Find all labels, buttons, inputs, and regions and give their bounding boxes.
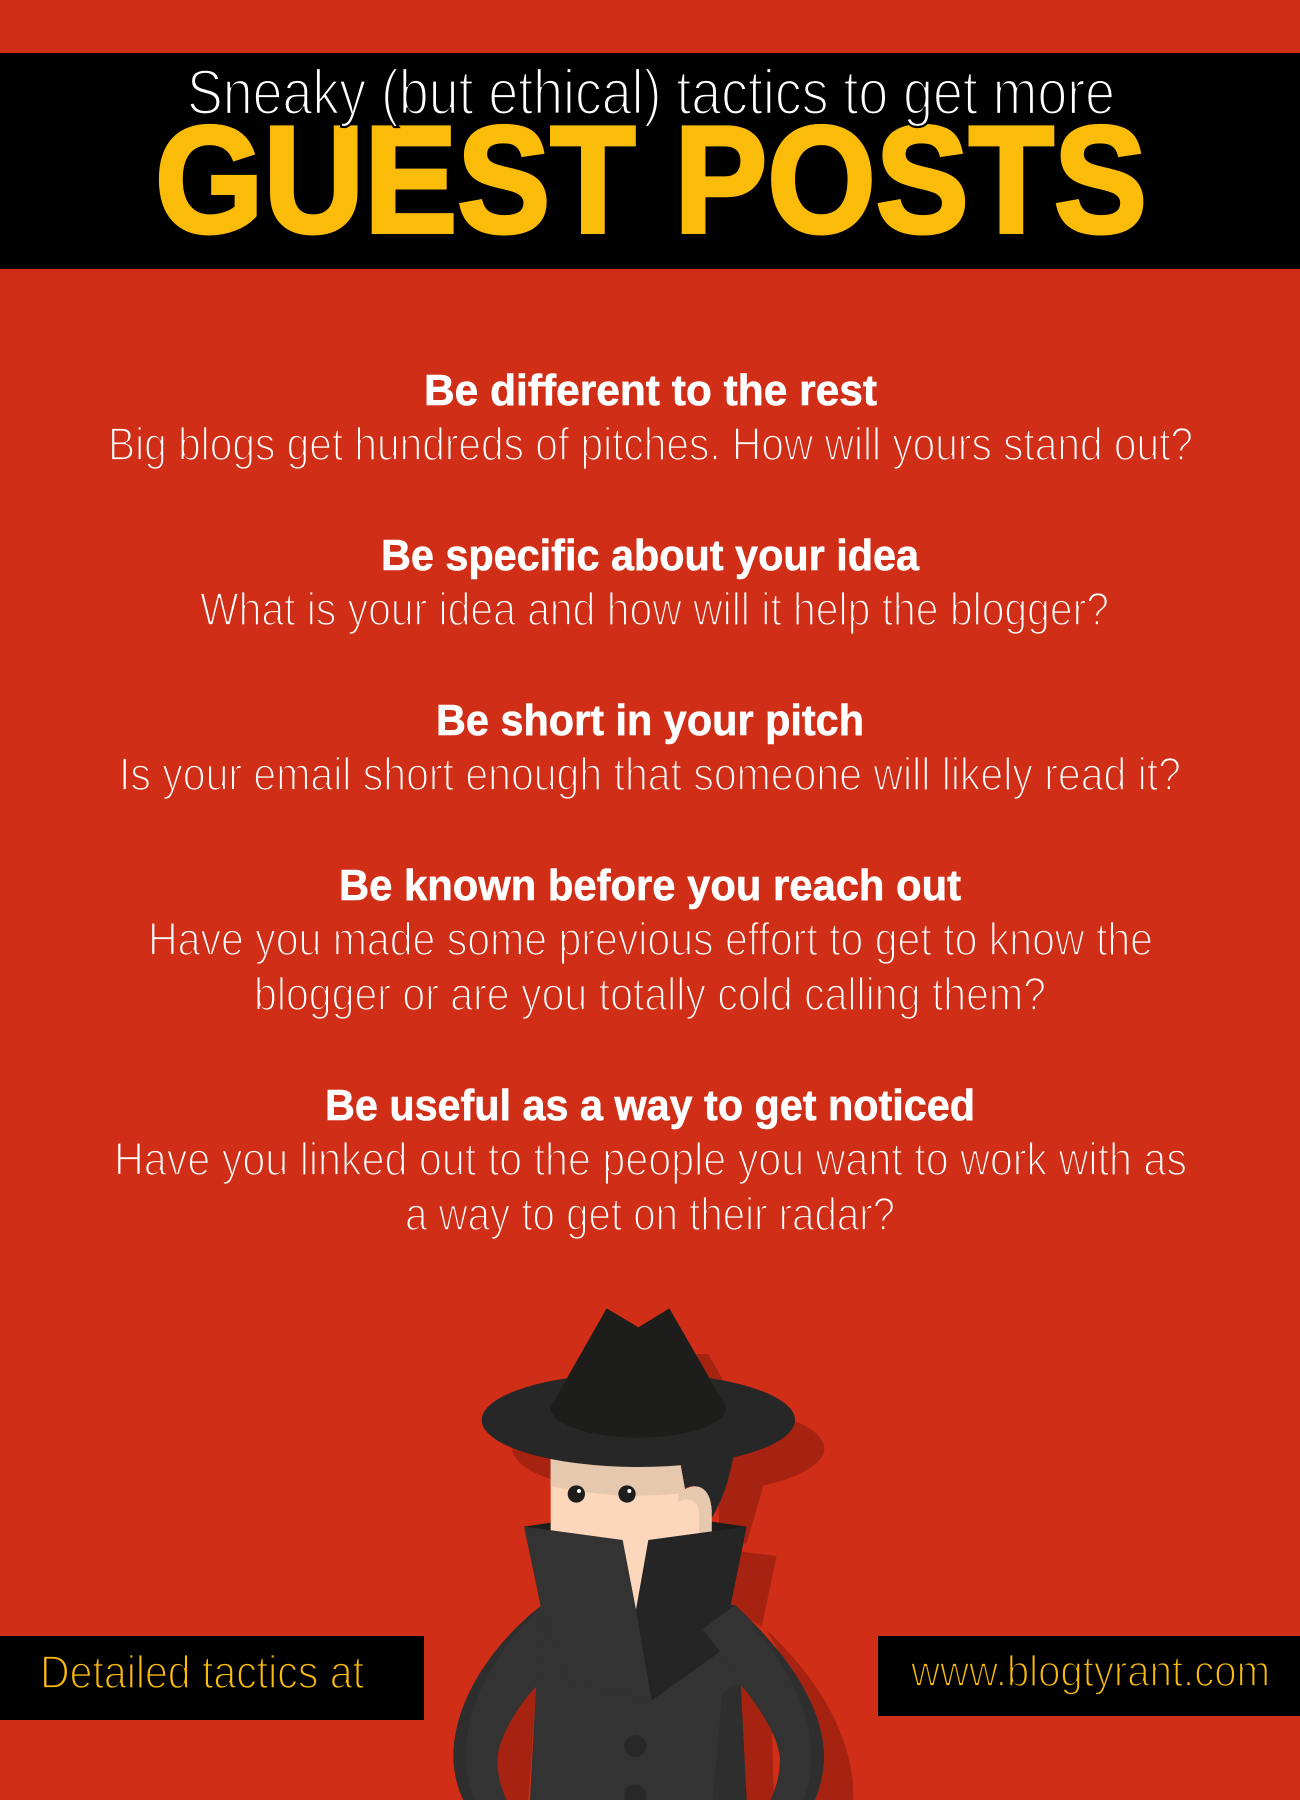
coat buttons (624, 1735, 646, 1800)
tactic 3: Be short in your pitch (436, 696, 864, 745)
tactic 4: Be known before you reach out (339, 861, 961, 910)
inner collar (524, 1522, 747, 1543)
tactic 1 (108, 366, 1193, 470)
coat body (530, 1580, 747, 1800)
hat brim (482, 1373, 795, 1467)
tactic 2: Be specific about your idea (381, 531, 919, 580)
right arm (703, 1605, 824, 1800)
tactic 4 (148, 861, 1153, 1020)
hair (677, 1457, 733, 1519)
tactic 4: blogger or are you totally cold calling them? (254, 968, 1046, 1020)
tactic 3 (119, 696, 1181, 800)
coat right lapel (636, 1527, 747, 1701)
hat crown (551, 1308, 726, 1438)
footer box: detailed tactics (0, 1636, 424, 1720)
face (551, 1457, 712, 1610)
arm cuff (703, 1605, 753, 1652)
header band (0, 53, 1300, 269)
tactic 3: Is your email short enough that someone will likely read it? (119, 748, 1181, 800)
tactic 2 (200, 531, 1109, 635)
footer box: website (878, 1636, 1300, 1716)
footer box: detailed tactics: Detailed tactics at (40, 1646, 364, 1698)
tactic 2: What is your idea and how will it help the blogger? (200, 583, 1109, 635)
tactic 5 (114, 1081, 1187, 1240)
cast shadow (497, 1354, 853, 1800)
tactic 1: Big blogs get hundreds of pitches. How will yours stand out? (108, 418, 1193, 470)
coat left collar (524, 1527, 652, 1701)
tactic 1: Be different to the rest (424, 366, 877, 415)
title: guest posts: GUEST POSTS (155, 95, 1147, 265)
subtitle: Sneaky (but ethical) tactics to get more (187, 58, 1115, 128)
footer box: website: www.blogtyrant.com (910, 1647, 1270, 1696)
tactic 5: Have you linked out to the people you want to work with as (114, 1133, 1187, 1185)
tactic 5: Be useful as a way to get noticed (325, 1081, 975, 1130)
illustration: spy in hat and trench coat (453, 1308, 853, 1800)
left arm (453, 1606, 567, 1800)
tactic 5: a way to get on their radar? (405, 1188, 895, 1240)
eyes (568, 1485, 636, 1503)
tactic 4: Have you made some previous effort to get to know the (148, 913, 1153, 965)
